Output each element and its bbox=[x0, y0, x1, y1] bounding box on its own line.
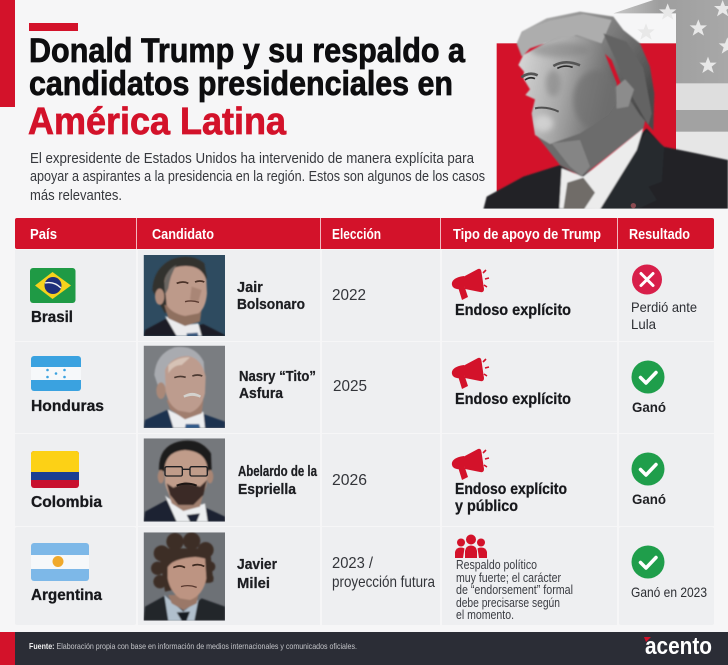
table header: Candidato bbox=[152, 227, 214, 243]
icon: megaphone bbox=[452, 269, 489, 300]
left red accent bar bbox=[0, 0, 15, 107]
intro paragraph: El expresidente de Estados Unidos ha intervenido de manera explícita para bbox=[30, 151, 475, 167]
icon: won bbox=[632, 452, 664, 486]
icon: megaphone bbox=[452, 358, 489, 389]
photo: Nasry Asfura bbox=[144, 346, 225, 428]
table header bbox=[15, 218, 714, 249]
footer bbox=[0, 632, 728, 665]
flag: Colombia bbox=[31, 451, 79, 488]
candidate: Abelardo de la Espriella: Espriella bbox=[238, 482, 297, 498]
country: Argentina: Argentina bbox=[31, 587, 102, 604]
support: Endoso explícito y público bbox=[455, 481, 567, 515]
support: Endoso explícito y público: y público bbox=[455, 498, 518, 515]
candidate: Jair Bolsonaro: Jair bbox=[237, 280, 263, 296]
icon: won bbox=[632, 360, 664, 394]
photo: Jair Bolsonaro bbox=[144, 255, 225, 336]
intro paragraph bbox=[30, 151, 485, 204]
source note: Fuente: Elaboración propia con base en información de medios internacionales y comunicados oficiales. bbox=[29, 641, 357, 651]
intro paragraph: apoyar a aspirantes a la presidencia en la región. Estos son algunos de los casos bbox=[30, 169, 485, 185]
intro paragraph: más relevantes. bbox=[30, 188, 122, 204]
row: Honduras bbox=[31, 346, 666, 428]
icon: people bbox=[455, 534, 487, 558]
candidate: Javier Milei: Javier bbox=[237, 557, 277, 573]
support: Endoso explícito: Endoso explícito bbox=[455, 391, 571, 408]
title: América Latina bbox=[28, 101, 287, 143]
flag: Argentina bbox=[31, 543, 89, 581]
year: 2023 / proyección futura: proyección futura bbox=[332, 574, 435, 591]
support: Respaldo político bbox=[456, 558, 573, 622]
logo: acento: acento bbox=[645, 633, 712, 660]
icon: megaphone bbox=[452, 449, 489, 480]
country: Colombia: Colombia bbox=[31, 494, 102, 511]
support: Respaldo político: de “endorsement” formal bbox=[456, 583, 573, 597]
year: 2025: 2025 bbox=[333, 378, 367, 395]
support: Respaldo político: debe precisarse según bbox=[456, 596, 560, 610]
candidate: Javier Milei: Milei bbox=[237, 576, 270, 592]
result: Perdió ante Lula: Lula bbox=[631, 316, 656, 332]
icon: lost bbox=[632, 264, 662, 294]
result: Ganó: Ganó bbox=[632, 399, 666, 415]
photo: Javier Milei bbox=[144, 532, 225, 621]
support: Respaldo político: Respaldo político bbox=[456, 558, 537, 572]
result: Perdió ante Lula: Perdió ante bbox=[631, 299, 697, 315]
flag: Brasil bbox=[30, 268, 76, 303]
country: Brasil: Brasil bbox=[31, 309, 73, 326]
support: Endoso explícito y público: Endoso explícito bbox=[455, 481, 567, 498]
result: Ganó: Ganó bbox=[632, 491, 666, 507]
year: 2022: 2022 bbox=[332, 287, 366, 304]
candidate: Abelardo de la Espriella: Abelardo de la bbox=[238, 464, 318, 480]
table header: País bbox=[30, 227, 57, 243]
photo: Abelardo de la Espriella bbox=[144, 438, 225, 522]
table header: Resultado bbox=[629, 227, 690, 243]
candidate: Jair Bolsonaro bbox=[237, 280, 305, 313]
title: Donald Trump y su respaldo a bbox=[29, 32, 466, 70]
row: Colombia bbox=[31, 438, 666, 522]
result: Ganó en 2023: Ganó en 2023 bbox=[631, 584, 707, 600]
red title dash bbox=[29, 23, 78, 31]
result: Perdió ante Lula bbox=[631, 299, 697, 332]
support: Respaldo político: el momento. bbox=[456, 608, 514, 622]
year: 2023 / proyección futura: 2023 / bbox=[332, 555, 374, 572]
table body cells bbox=[15, 250, 714, 625]
table header: Elección bbox=[332, 227, 381, 243]
candidate: Nasry Asfura bbox=[239, 369, 316, 402]
title: candidatos presidenciales en bbox=[29, 65, 453, 103]
flag: Honduras bbox=[31, 356, 81, 391]
candidate: Abelardo de la Espriella bbox=[238, 464, 318, 498]
year: 2023 / proyección futura bbox=[332, 555, 435, 591]
country: Honduras: Honduras bbox=[31, 398, 104, 415]
year: 2026: 2026 bbox=[332, 472, 367, 489]
candidate: Javier Milei bbox=[237, 557, 277, 592]
icon: won bbox=[632, 546, 664, 578]
Trump portrait with flag and red block bbox=[483, 0, 728, 209]
candidate: Nasry Asfura: Nasry “Tito” bbox=[239, 369, 316, 385]
title bbox=[28, 32, 466, 143]
row: Brasil bbox=[30, 255, 697, 336]
table header: Tipo de apoyo de Trump bbox=[453, 227, 601, 243]
candidate: Jair Bolsonaro: Bolsonaro bbox=[237, 297, 305, 313]
row: Argentina bbox=[31, 532, 707, 622]
support: Respaldo político: muy fuerte; el carácter bbox=[456, 571, 561, 585]
support: Endoso explícito: Endoso explícito bbox=[455, 302, 571, 319]
candidate: Nasry Asfura: Asfura bbox=[239, 386, 284, 402]
